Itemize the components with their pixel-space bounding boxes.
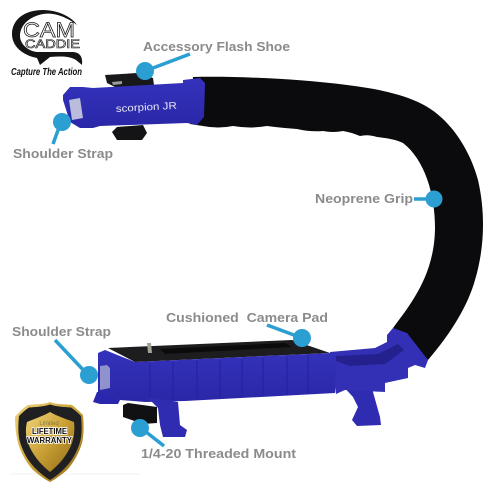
- lower thumb knob: [112, 125, 147, 140]
- label: shoulder strap bottom: Shoulder Strap: [12, 324, 111, 339]
- lower blue base: [93, 328, 428, 437]
- label: cushioned camera pad: [166, 310, 328, 347]
- logo: Cam Caddie: CADDIE: [25, 37, 80, 51]
- upper blue handle: [63, 73, 205, 140]
- upper blue handle: scorpion JR: [116, 101, 177, 115]
- right foot: [342, 385, 381, 426]
- threaded mount knob: [123, 403, 157, 424]
- warranty shield: WARRANTY: [27, 436, 73, 445]
- arm to grip: [330, 328, 428, 394]
- label: threaded mount: [131, 419, 297, 461]
- front foot: [147, 397, 187, 437]
- base body: [98, 350, 336, 402]
- logo: Cam Caddie: CAM: [23, 19, 75, 42]
- label: neoprene grip: [315, 190, 442, 208]
- warranty shield: [15, 402, 84, 482]
- rear foot: [93, 391, 120, 404]
- label: shoulder strap top: Shoulder Strap: [13, 146, 113, 161]
- label: shoulder strap bottom: [12, 324, 111, 384]
- label: accessory flash shoe: [136, 39, 290, 80]
- label: cushioned camera pad: Cushioned Camera Pad: [166, 310, 328, 325]
- warranty shield: Limited: [39, 421, 59, 427]
- flash shoe: [105, 73, 154, 88]
- warranty shield: LIFETIME: [32, 427, 68, 436]
- camera pad: [108, 340, 330, 362]
- logo: Cam Caddie: Capture The Action: [11, 67, 82, 78]
- label: neoprene grip: Neoprene Grip: [315, 191, 413, 206]
- label: shoulder strap top: [13, 113, 113, 161]
- logo: Cam Caddie: [11, 10, 82, 78]
- neoprene grip: [190, 77, 483, 360]
- label: accessory flash shoe: Accessory Flash Shoe: [143, 39, 290, 54]
- label: threaded mount: 1/4-20 Threaded Mount: [141, 446, 297, 461]
